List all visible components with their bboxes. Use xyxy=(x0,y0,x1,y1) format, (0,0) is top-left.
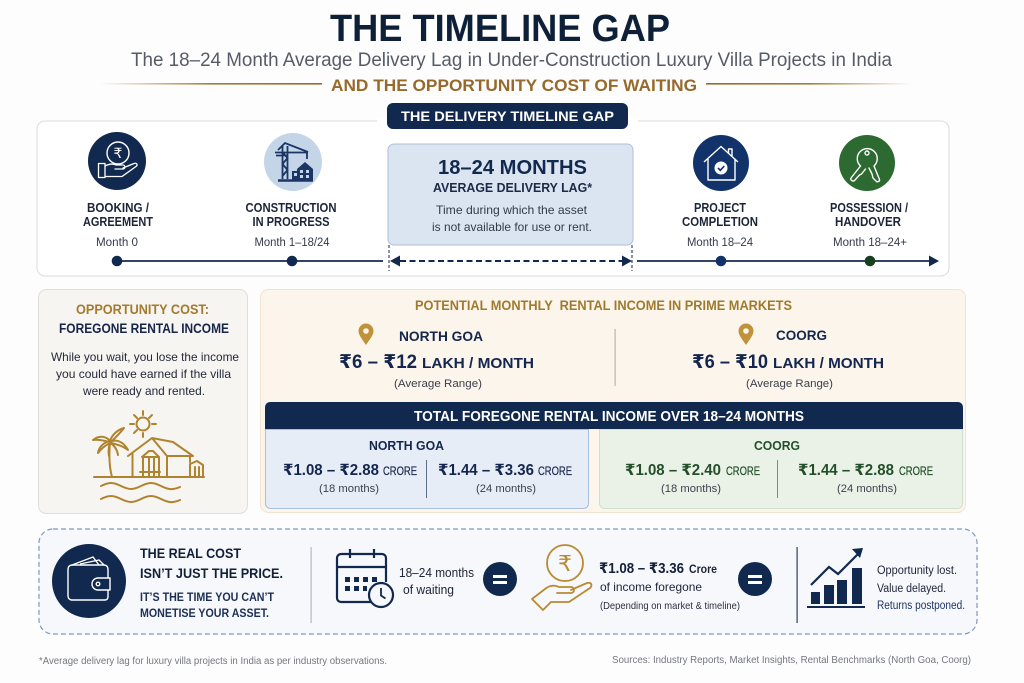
outcome text: Opportunity lost. xyxy=(877,565,957,577)
icon: calendar with clock xyxy=(337,549,393,607)
timeline: left segment xyxy=(112,256,383,266)
market: Coorg: (Average Range) xyxy=(746,378,833,390)
message text: IT’S THE TIME YOU CAN’T xyxy=(140,590,275,604)
equals sign xyxy=(738,562,772,596)
subtitle: The 18–24 Month Average Delivery Lag in Under-Construction Luxury Villa Projects in India xyxy=(131,49,892,71)
footnote: *Average delivery lag for luxury villa projects in India as per industry observations. xyxy=(39,656,387,667)
panel: rental income xyxy=(260,290,966,512)
total foregone header bar xyxy=(265,402,963,429)
market: North Goa: (Average Range) xyxy=(394,378,482,390)
icon: project completion house xyxy=(693,135,749,191)
callout: 18–24 months lag: Time during which the asset xyxy=(436,203,588,217)
label: possession xyxy=(830,201,908,249)
market: Coorg xyxy=(692,324,884,390)
panel: delivery timeline xyxy=(37,103,949,276)
card: Coorg total: ₹1.08 – ₹2.40 xyxy=(625,462,721,479)
message text: MONETISE YOUR ASSET. xyxy=(140,606,269,620)
callout: 18–24 months lag: 18–24 MONTHS xyxy=(438,157,587,179)
card: North Goa total: (18 months) xyxy=(319,483,379,495)
card: Coorg total: ₹1.44 – ₹2.88 xyxy=(798,462,894,479)
card: Coorg total: CRORE xyxy=(726,466,760,478)
card: North Goa total: CRORE xyxy=(383,466,417,478)
card: Coorg total: (24 months) xyxy=(837,483,897,495)
arrow: gap span xyxy=(389,245,632,271)
market: North Goa: ₹6 – ₹12 xyxy=(339,352,417,373)
market: North Goa: LAKH / MONTH xyxy=(422,355,534,372)
income foregone text: Crore xyxy=(689,562,717,576)
label: booking: BOOKING / xyxy=(87,201,149,215)
market: North Goa: NORTH GOA xyxy=(399,328,483,344)
icon: booking hand with rupee coin xyxy=(88,132,146,190)
card: Coorg total: (18 months) xyxy=(661,483,721,495)
waiting text xyxy=(399,566,474,597)
section heading pill: THE DELIVERY TIMELINE GAP xyxy=(401,108,614,124)
message text xyxy=(140,545,283,620)
outcome text: Returns postponed. xyxy=(877,600,965,612)
label: construction xyxy=(246,201,336,249)
card: Coorg total: CRORE xyxy=(899,466,933,478)
body text: were ready and rented. xyxy=(82,384,205,398)
card: North Goa total xyxy=(266,430,588,508)
card: North Goa total: CRORE xyxy=(538,466,572,478)
equals sign xyxy=(483,562,517,596)
icon: hand with rupee coin: ₹ xyxy=(558,551,572,576)
income foregone text: of income foregone xyxy=(600,580,702,594)
icon: map pin xyxy=(358,324,374,345)
income foregone text: ₹1.08 – ₹3.36 xyxy=(599,561,684,577)
title: THE TIMELINE GAP xyxy=(330,8,670,50)
label: booking: Month 0 xyxy=(96,237,138,249)
icon: construction crane xyxy=(264,133,322,191)
card: North Goa total: NORTH GOA xyxy=(369,438,445,453)
panel: the real cost xyxy=(39,529,977,634)
income foregone text xyxy=(599,561,740,612)
body text: you could have earned if the villa xyxy=(56,367,231,381)
label: possession: Month 18–24+ xyxy=(833,237,907,249)
market: Coorg: LAKH / MONTH xyxy=(773,355,884,372)
section heading pill xyxy=(377,103,638,129)
card: Coorg total xyxy=(600,430,962,508)
callout: 18–24 months lag: is not available for use or rent. xyxy=(432,220,592,234)
label: project completion: Month 18–24 xyxy=(687,237,754,249)
message text: ISN’T JUST THE PRICE. xyxy=(140,565,283,581)
header xyxy=(100,8,912,95)
timeline: right segment xyxy=(637,256,939,266)
label: booking xyxy=(83,201,153,249)
card: North Goa total: ₹1.08 – ₹2.88 xyxy=(283,462,379,479)
market: Coorg: COORG xyxy=(776,327,827,343)
label: project completion: COMPLETION xyxy=(682,215,758,229)
heading: FOREGONE RENTAL INCOME xyxy=(59,321,229,336)
icon: possession keys xyxy=(839,135,895,191)
market: Coorg: ₹6 – ₹10 xyxy=(692,352,768,373)
card: Coorg total: COORG xyxy=(754,438,800,453)
label: construction: IN PROGRESS xyxy=(252,215,330,229)
heading: POTENTIAL MONTHLY RENTAL INCOME IN PRIME MARKETS xyxy=(415,298,792,313)
callout: 18–24 months lag: AVERAGE DELIVERY LAG* xyxy=(433,180,593,195)
total foregone header bar: TOTAL FOREGONE RENTAL INCOME OVER 18–24 MONTHS xyxy=(414,409,804,425)
sources: Sources: Industry Reports, Market Insights, Rental Benchmarks (North Goa, Coorg) xyxy=(612,654,971,666)
card: North Goa total: ₹1.44 – ₹3.36 xyxy=(438,462,534,479)
outcome text: Value delayed. xyxy=(877,583,946,595)
label: project completion xyxy=(682,201,758,249)
income foregone text: (Depending on market & timeline) xyxy=(600,600,740,612)
heading: OPPORTUNITY COST: xyxy=(76,302,209,317)
body text xyxy=(51,350,239,398)
label: booking: AGREEMENT xyxy=(83,215,153,229)
label: construction: CONSTRUCTION xyxy=(246,201,336,215)
label: construction: Month 1–18/24 xyxy=(254,237,330,249)
body text: While you wait, you lose the income xyxy=(51,350,239,364)
icon: growth chart xyxy=(807,548,865,608)
waiting text: of waiting xyxy=(403,583,454,597)
icon: hand with rupee coin xyxy=(532,545,591,610)
market: North Goa xyxy=(339,324,534,390)
card: North Goa total: (24 months) xyxy=(476,483,536,495)
tagline: AND THE OPPORTUNITY COST OF WAITING xyxy=(331,77,697,95)
label: project completion: PROJECT xyxy=(694,201,746,215)
waiting text: 18–24 months xyxy=(399,566,474,580)
icon: villa with palm and sun xyxy=(93,411,204,502)
label: possession: POSSESSION / xyxy=(830,201,908,215)
panel: opportunity cost xyxy=(38,290,248,514)
message text: THE REAL COST xyxy=(140,545,241,561)
outcome text xyxy=(877,565,965,612)
callout: 18–24 months lag xyxy=(388,144,633,245)
label: possession: HANDOVER xyxy=(835,215,901,229)
icon: booking hand with rupee coin: ₹ xyxy=(114,145,123,161)
icon: wallet xyxy=(52,544,126,618)
icon: map pin xyxy=(738,324,754,345)
heading xyxy=(59,302,229,336)
